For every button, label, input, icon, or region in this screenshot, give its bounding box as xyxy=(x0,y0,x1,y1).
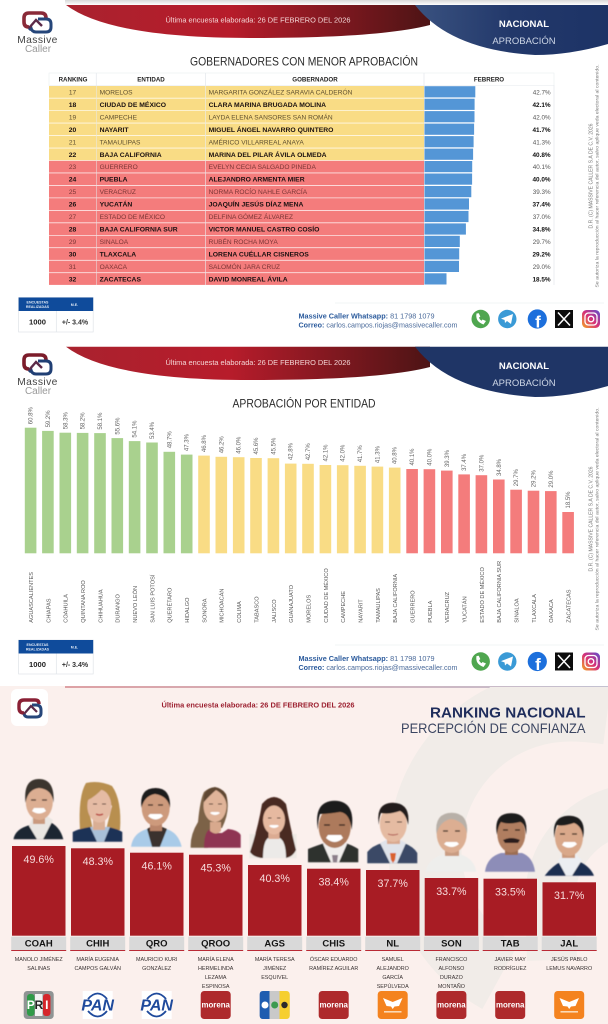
row 25 Veracruz: 25 xyxy=(69,189,76,196)
governor names: LEMUS NAVARRO xyxy=(546,966,592,972)
state labels: VERACRUZ xyxy=(445,591,451,623)
bar values xyxy=(29,407,572,508)
governor names: JAVIER MAY xyxy=(495,957,526,963)
state code bands: JAL xyxy=(560,939,578,950)
header: red band with survey date: Última encuesta elaborada: 26 DE FEBRERO DEL 2026 xyxy=(166,16,351,24)
row 24 Puebla: ALEJANDRO ARMENTA MIER xyxy=(209,177,305,184)
row 26 Yucatán: 37.4% xyxy=(532,202,551,209)
bar values: 45.6% xyxy=(254,437,260,454)
row 20 Nayarit: MIGUEL ÁNGEL NAVARRO QUINTERO xyxy=(209,125,333,134)
photo: Tere Jiménez xyxy=(249,797,297,858)
row 28 Baja California Sur: BAJA CALIFORNIA SUR xyxy=(100,227,178,234)
state labels: COAHUILA xyxy=(64,594,70,623)
state code bands xyxy=(11,937,597,951)
governor names: LEZAMA xyxy=(205,975,227,981)
governor names: ESQUIVEL xyxy=(261,975,288,981)
icon: WhatsApp xyxy=(472,310,490,328)
party logo: Morena xyxy=(436,991,466,1019)
state labels: ZACATECAS xyxy=(566,589,572,623)
photo: Samuel García xyxy=(367,803,417,863)
state labels: JALISCO xyxy=(272,599,278,623)
row 28 Baja California Sur: 28 xyxy=(69,227,76,234)
bar values: 42.8% xyxy=(289,442,295,460)
row 22 Baja California: 22 xyxy=(69,152,76,159)
governor names: MARÍA EUGENIA xyxy=(76,956,119,963)
bar values: 41.7% xyxy=(358,445,364,462)
row 26 Yucatán: YUCATÁN xyxy=(100,200,132,209)
row 25 Veracruz: NORMA ROCÍO NAHLE GARCÍA xyxy=(209,187,308,196)
party logo: Morena xyxy=(201,991,231,1019)
header: blue national approval badge: APROBACIÓN xyxy=(492,378,556,389)
icon: Facebook: f xyxy=(535,312,541,332)
row 27 Estado de México: DELFINA GÓMEZ ÁLVAREZ xyxy=(209,212,293,221)
photo: Mara Lezama xyxy=(191,787,241,848)
row 21 Tamaulipas: AMÉRICO VILLARREAL ANAYA xyxy=(209,137,304,146)
bar values: 29.0% xyxy=(549,470,555,488)
row 22 Baja California: MARINA DEL PILAR ÁVILA OLMEDA xyxy=(209,150,327,159)
bar values: 46.8% xyxy=(202,434,208,452)
icon: Facebook xyxy=(528,652,547,674)
governor names xyxy=(15,956,592,990)
table: governors xyxy=(49,73,554,285)
row 18 Ciudad de México: 42.1% xyxy=(532,102,551,109)
party logo: PAN: PAN xyxy=(140,998,173,1014)
state labels: TABASCO xyxy=(254,596,260,623)
row 24 Puebla: 40.0% xyxy=(532,177,551,184)
row 20 Nayarit: 20 xyxy=(69,127,76,134)
photo: Javier May xyxy=(485,813,535,872)
bar values: 58.3% xyxy=(63,412,69,429)
survey date: Última encuesta elaborada: 26 DE FEBRERO DEL 2026 xyxy=(162,700,355,710)
row 32 Zacatecas xyxy=(49,273,551,285)
icon: X xyxy=(555,310,573,328)
bar values: 40.0% xyxy=(427,448,433,466)
heading: table title: GOBERNADORES CON MENOR APROBACIÓN xyxy=(190,54,418,68)
logo: Massive Caller: Massive xyxy=(17,35,58,46)
governor names: ESPINOSA xyxy=(202,984,230,990)
photo: Pablo Lemus xyxy=(545,816,594,876)
row 28 Baja California Sur: 34.8% xyxy=(532,227,551,234)
panel: governors with lowest approval xyxy=(0,0,608,343)
row 26 Yucatán: 26 xyxy=(69,202,76,209)
survey sample box xyxy=(19,640,93,674)
state code bands: CHIH xyxy=(86,939,109,950)
state code bands: COAH xyxy=(25,939,53,950)
row 29 Sinaloa: RUBÉN ROCHA MOYA xyxy=(209,237,278,246)
header: blue national approval badge: APROBACIÓN xyxy=(492,36,556,47)
header: red band with survey date: Última encuesta elaborada: 26 DE FEBRERO DEL 2026 xyxy=(166,358,351,367)
state labels: QUINTANA ROO xyxy=(81,580,87,623)
row 26 Yucatán: JOAQUÍN JESÚS DÍAZ MENA xyxy=(209,200,303,209)
row 19 Campeche xyxy=(49,111,551,123)
governor names: ALEJANDRO xyxy=(377,966,409,972)
bar values: 54.1% xyxy=(133,420,139,438)
row 32 Zacatecas: 18.5% xyxy=(532,276,551,284)
row 21 Tamaulipas: 41.3% xyxy=(533,139,551,146)
state labels: SONORA xyxy=(202,598,208,623)
state labels: TLAXCALA xyxy=(532,594,538,623)
state labels: COLIMA xyxy=(237,601,243,623)
row 18 Ciudad de México: CLARA MARINA BRUGADA MOLINA xyxy=(209,102,326,109)
governor names: SAMUEL xyxy=(382,957,404,963)
table header: ENTIDAD xyxy=(137,76,165,84)
icon: Telegram xyxy=(498,652,516,671)
percentage labels: 45.3% xyxy=(201,862,231,874)
header: blue national approval badge: NACIONAL xyxy=(499,19,549,30)
state labels: NUEVO LEÓN xyxy=(132,586,139,623)
bar values: 55.6% xyxy=(115,417,121,435)
bar values: 18.5% xyxy=(566,491,572,508)
row 18 Ciudad de México: 18 xyxy=(69,102,76,109)
survey sample box: REALIZADAS xyxy=(26,648,50,652)
row 22 Baja California: BAJA CALIFORNIA xyxy=(100,152,162,159)
bar values: 53.4% xyxy=(150,421,156,439)
row 30 Tlaxcala: TLAXCALA xyxy=(100,252,136,258)
row 32 Zacatecas: 32 xyxy=(69,276,76,284)
party logo: Morena: morena xyxy=(496,1000,525,1010)
bar values: 47.3% xyxy=(185,433,191,451)
copyright note: D.R. (C) MASSIVE CALLER S.A DE C.V. 2026 xyxy=(588,123,594,228)
row 29 Sinaloa: SINALOA xyxy=(100,239,129,246)
party logo: coalition PAN PRI PRD xyxy=(260,991,290,1019)
party logo: Morena: morena xyxy=(437,1000,466,1010)
survey sample box: 1000 xyxy=(29,318,46,326)
bar values: 42.0% xyxy=(341,444,347,462)
row 21 Tamaulipas: TAMAULIPAS xyxy=(100,139,141,146)
row 31 Oaxaca: 29.0% xyxy=(533,264,551,271)
state code bands: AGS xyxy=(264,939,285,950)
row 29 Sinaloa: 29.7% xyxy=(533,239,551,246)
table header: FEBRERO xyxy=(474,76,504,84)
bars: trust percentage xyxy=(12,846,596,936)
row 23 Guerrero: EVELYN CECIA SALGADO PINEDA xyxy=(209,164,316,171)
state labels: MICHOACÁN xyxy=(219,589,226,623)
party logo: Morena: morena xyxy=(319,1000,349,1010)
photo: Eduardo Ramírez xyxy=(308,801,358,862)
row 17 Morelos: MORELOS xyxy=(100,89,133,96)
state labels: MORELOS xyxy=(306,594,312,623)
bar values: 45.5% xyxy=(271,437,277,455)
survey sample box: 1000 xyxy=(29,660,46,669)
contact details: Correo: carlos.campos.riojas@massivecaller.com xyxy=(298,664,458,672)
survey sample box: REALIZADAS xyxy=(26,305,50,309)
bar values: 29.7% xyxy=(514,469,520,486)
heading: ranking title: PERCEPCIÓN DE CONFIANZA xyxy=(401,720,586,736)
state labels: ESTADO DE MÉXICO xyxy=(479,567,486,623)
row 24 Puebla xyxy=(49,173,551,185)
state labels: CHIAPAS xyxy=(46,598,52,623)
row 20 Nayarit: NAYARIT xyxy=(100,127,129,134)
state labels: TAMAULIPAS xyxy=(376,588,382,623)
bar values: 40.1% xyxy=(410,448,416,466)
governor names: RODRÍGUEZ xyxy=(494,965,527,972)
party logo: Movimiento Ciudadano xyxy=(378,991,408,1019)
row 25 Veracruz xyxy=(49,186,551,198)
governor names: FRANCISCO xyxy=(436,957,467,963)
bar values: 59.2% xyxy=(46,410,52,427)
table header: RANKING xyxy=(59,76,88,84)
row 27 Estado de México: 37.0% xyxy=(533,214,551,221)
party logo: PAN: PAN xyxy=(81,998,114,1014)
row 28 Baja California Sur xyxy=(49,223,551,235)
header: blue national approval badge xyxy=(415,347,608,397)
row 18 Ciudad de México: CIUDAD DE MÉXICO xyxy=(100,100,166,109)
state labels: DURANGO xyxy=(116,593,122,623)
party logo: Morena: morena xyxy=(201,1000,231,1010)
row 23 Guerrero: GUERRERO xyxy=(100,164,138,171)
governor names: MAURICIO KURI xyxy=(136,957,177,963)
contact details: Massive Caller Whatsapp: 81 1798 1079 xyxy=(298,655,435,663)
panel: approval by state xyxy=(0,343,608,687)
state code bands: QROO xyxy=(201,939,230,950)
row 18 Ciudad de México xyxy=(49,98,551,110)
row 17 Morelos xyxy=(49,86,551,98)
bar values: 41.3% xyxy=(375,445,381,463)
governor names: HERMELINDA xyxy=(198,966,234,972)
party logo: PRI: P xyxy=(27,998,35,1012)
icon: Facebook xyxy=(528,309,547,332)
row 31 Oaxaca: OAXACA xyxy=(100,264,128,271)
row 22 Baja California xyxy=(49,148,551,160)
bar values: 48.7% xyxy=(167,431,173,448)
party logo: Morena xyxy=(319,991,349,1019)
copyright note: Se autoriza la reproducción al hacer referencia del autor, salvo aplique veda electoral al contenido. xyxy=(594,64,600,288)
state labels: PUEBLA xyxy=(428,600,434,623)
state labels: QUERÉTARO xyxy=(167,587,174,623)
heading: ranking title xyxy=(401,704,586,736)
row 20 Nayarit: 41.7% xyxy=(532,127,551,134)
row 17 Morelos: MARGARITA GONZÁLEZ SARAVIA CALDERÓN xyxy=(209,87,353,96)
icon: Facebook: f xyxy=(535,655,541,674)
bar values: 39.3% xyxy=(445,449,451,467)
row 31 Oaxaca xyxy=(49,261,551,272)
state labels: CAMPECHE xyxy=(341,591,347,623)
party logo: PRI: I xyxy=(45,998,48,1012)
state labels: HIDALGO xyxy=(185,597,191,623)
green bars xyxy=(25,428,192,553)
percentage labels xyxy=(24,854,585,902)
bar values: 60.8% xyxy=(29,407,35,424)
governor names: JIMÉNEZ xyxy=(263,965,287,972)
percentage labels: 37.7% xyxy=(378,878,408,890)
row 23 Guerrero: 40.1% xyxy=(533,164,551,171)
row 25 Veracruz: 39.3% xyxy=(533,189,551,196)
state labels: YUCATÁN xyxy=(462,596,468,623)
header: red band with survey date xyxy=(66,5,430,38)
bar values: 34.8% xyxy=(497,458,503,476)
bar chart: approval by state xyxy=(25,407,574,623)
row 23 Guerrero xyxy=(49,161,551,173)
state labels: SAN LUIS POTOSÍ xyxy=(149,574,156,623)
state code bands: QRO xyxy=(146,939,168,950)
bar values: 29.2% xyxy=(532,470,538,487)
state labels: OAXACA xyxy=(549,599,555,623)
table header xyxy=(49,73,554,285)
bar values: 42.1% xyxy=(323,444,329,462)
percentage labels: 31.7% xyxy=(554,890,585,902)
bar values: 42.7% xyxy=(306,443,312,460)
governor names: ÓSCAR EDUARDO xyxy=(310,956,358,963)
row 21 Tamaulipas xyxy=(49,136,551,148)
header: red band with survey date xyxy=(66,347,430,380)
logo: Massive Caller xyxy=(17,355,58,397)
governor names: GARCÍA xyxy=(382,974,403,981)
row 17 Morelos: 17 xyxy=(69,89,76,96)
red bars xyxy=(406,469,574,553)
state labels: SINALOA xyxy=(514,598,520,623)
percentage labels: 46.1% xyxy=(142,860,172,872)
row 23 Guerrero: 23 xyxy=(69,164,76,171)
bar values: 58.1% xyxy=(98,412,104,430)
icon: X xyxy=(555,652,573,670)
governor names: MARÍA ELENA xyxy=(198,956,234,963)
row 30 Tlaxcala: 30 xyxy=(69,252,76,258)
row 21 Tamaulipas: 21 xyxy=(69,139,76,146)
governor names: DURAZO xyxy=(440,975,463,981)
percentage labels: 49.6% xyxy=(24,854,54,866)
survey sample box xyxy=(19,298,93,332)
header: blue national approval badge: NACIONAL xyxy=(499,361,549,372)
governor names: JESÚS PABLO xyxy=(551,956,587,963)
party logo: PRI: R xyxy=(34,998,43,1012)
photo: María Eugenia Campos xyxy=(73,782,122,842)
bar values: 58.2% xyxy=(81,412,87,429)
row 17 Morelos: 42.7% xyxy=(533,89,551,96)
logo: Massive Caller: Caller xyxy=(25,386,52,397)
percentage labels: 48.3% xyxy=(83,856,113,868)
panel: national trust ranking xyxy=(0,686,608,1024)
row 20 Nayarit xyxy=(49,123,551,135)
party logo: Movimiento Ciudadano xyxy=(554,991,584,1019)
governor names: MANOLO JIMÉNEZ xyxy=(15,956,63,963)
contact details xyxy=(298,312,458,330)
row 27 Estado de México xyxy=(49,211,551,222)
survey sample box: +/- 3.4% xyxy=(62,662,89,669)
party logo: PAN xyxy=(140,991,173,1019)
row 27 Estado de México: 27 xyxy=(69,214,76,221)
state labels: AGUASCALIENTES xyxy=(29,572,35,623)
percentage labels: 33.5% xyxy=(495,886,526,898)
header: blue national approval badge xyxy=(415,5,608,55)
logo tile xyxy=(11,689,48,726)
row 22 Baja California: 40.8% xyxy=(532,152,551,159)
party logo: PRI xyxy=(24,991,54,1019)
copyright note: D.R. (C) MASSIVE CALLER S.A DE C.V. 2026 xyxy=(588,466,594,572)
icon: WhatsApp xyxy=(472,652,490,671)
state code bands: TAB xyxy=(501,939,520,950)
photo: Manolo Jiménez xyxy=(14,779,63,839)
logo: Massive Caller: Caller xyxy=(25,44,52,55)
governor names: ALFONSO xyxy=(439,966,464,972)
row 24 Puebla: 24 xyxy=(69,177,76,184)
state code bands: SON xyxy=(441,939,462,950)
photo: Alfonso Durazo xyxy=(426,813,476,872)
row 32 Zacatecas: DAVID MONREAL ÁVILA xyxy=(209,274,288,284)
survey sample box: +/- 3.4% xyxy=(62,320,89,326)
row 30 Tlaxcala xyxy=(49,248,551,260)
governor names: MARÍA TERESA xyxy=(255,956,295,963)
copyright note xyxy=(588,64,600,288)
governor names: CAMPOS GALVÁN xyxy=(75,965,121,972)
heading: ranking title: RANKING NACIONAL xyxy=(430,704,586,722)
state labels: GUANAJUATO xyxy=(289,584,295,623)
bar values: 46.0% xyxy=(237,436,243,454)
contact details xyxy=(298,655,458,672)
state labels: BAJA CALIFORNIA SUR xyxy=(497,561,503,623)
percentage labels: 40.3% xyxy=(260,873,290,885)
row 24 Puebla: PUEBLA xyxy=(100,177,128,184)
logo: Massive Caller xyxy=(17,13,58,55)
row 29 Sinaloa: 29 xyxy=(69,239,76,246)
photo: Mauricio Kuri xyxy=(131,788,182,847)
state labels: NAYARIT xyxy=(358,599,364,623)
row 31 Oaxaca: 31 xyxy=(69,264,76,271)
row 19 Campeche: CAMPECHE xyxy=(100,114,138,121)
party logo: Morena xyxy=(495,991,525,1019)
bar values: 46.2% xyxy=(219,436,225,453)
state labels: CHIHUAHUA xyxy=(98,589,104,623)
bar values: 37.4% xyxy=(462,453,468,471)
row 29 Sinaloa xyxy=(49,236,551,247)
percentage labels: 33.7% xyxy=(436,886,467,898)
survey sample box: ENCUESTAS xyxy=(27,643,49,647)
governor names: GONZÁLEZ xyxy=(142,965,172,972)
survey sample box: M.E. xyxy=(71,645,78,649)
yellow bars xyxy=(198,456,400,553)
icon: Instagram xyxy=(582,652,600,670)
copyright note xyxy=(588,408,600,630)
row 26 Yucatán xyxy=(49,198,551,210)
governor names: SEPÚLVEDA xyxy=(377,983,409,990)
state labels: GUERRERO xyxy=(410,590,416,623)
state labels: CIUDAD DE MÉXICO xyxy=(323,568,330,623)
icon: Telegram xyxy=(498,310,516,328)
governor names: SALINAS xyxy=(27,966,50,972)
row 19 Campeche: 42.0% xyxy=(533,114,551,121)
copyright note: Se autoriza la reproducción al hacer referencia del autor, salvo aplique veda electoral al contenido. xyxy=(594,408,600,630)
percentage labels: 38.4% xyxy=(319,876,349,888)
bar values: 37.0% xyxy=(479,454,485,472)
row 27 Estado de México: ESTADO DE MÉXICO xyxy=(100,212,165,221)
governor names: MONTAÑO xyxy=(438,983,465,990)
row 28 Baja California Sur: VICTOR MANUEL CASTRO COSÍO xyxy=(209,225,319,234)
row 19 Campeche: 19 xyxy=(69,114,76,121)
icon: Instagram xyxy=(582,310,600,328)
bar values: 40.8% xyxy=(393,446,399,464)
survey sample box: M.E. xyxy=(71,303,78,307)
row 31 Oaxaca: SALOMÓN JARA CRUZ xyxy=(209,262,280,271)
row 30 Tlaxcala: LORENA CUÉLLAR CISNEROS xyxy=(209,250,309,258)
logo: Massive Caller: Massive xyxy=(17,377,58,388)
row 19 Campeche: LAYDA ELENA SANSORES SAN ROMÁN xyxy=(209,112,333,121)
row 25 Veracruz: VERACRUZ xyxy=(100,189,136,196)
heading: chart title: APROBACIÓN POR ENTIDAD xyxy=(232,396,376,410)
table header: GOBERNADOR xyxy=(292,76,338,84)
governor names: RAMÍREZ AGUILAR xyxy=(309,965,358,972)
party logo: PAN xyxy=(81,991,114,1019)
survey sample box: ENCUESTAS xyxy=(27,300,49,304)
state code bands: NL xyxy=(386,939,399,950)
contact details: Massive Caller Whatsapp: 81 1798 1079 xyxy=(298,312,435,320)
state labels xyxy=(29,561,572,623)
row 32 Zacatecas: ZACATECAS xyxy=(100,276,141,284)
state labels: BAJA CALIFORNIA xyxy=(393,574,399,623)
row 30 Tlaxcala: 29.2% xyxy=(532,252,551,258)
contact details: Correo: carlos.campos.riojas@massivecaller.com xyxy=(298,322,458,330)
state code bands: CHIS xyxy=(322,939,345,950)
